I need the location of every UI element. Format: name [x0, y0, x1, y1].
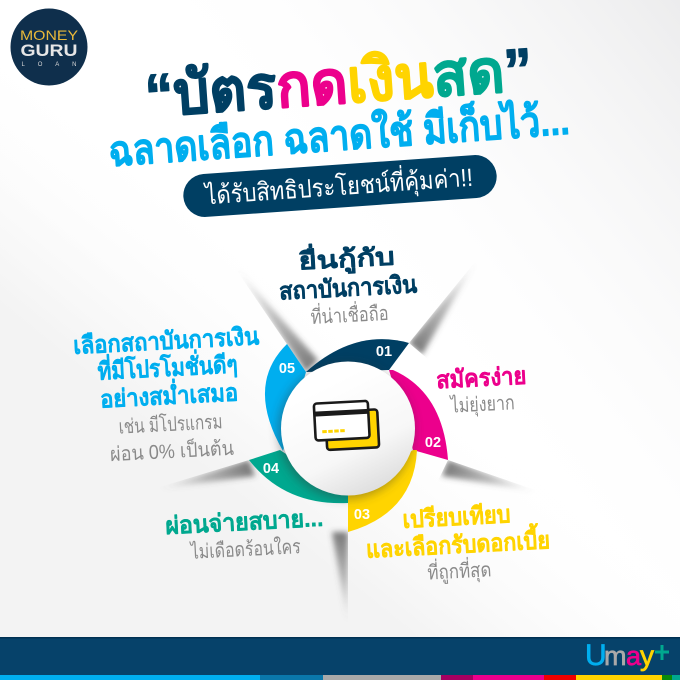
step 03 text — [364, 499, 552, 589]
step 02 text: สมัครง่าย — [436, 363, 527, 394]
icon: credit cards — [314, 400, 379, 451]
step 01 text: สถาบันการเงิน — [279, 271, 418, 306]
banner pill: ได้รับสิทธิประโยชน์ที่คุ้มค่า!! — [202, 160, 474, 212]
step 05 text: ที่มีโปรโมชั่นดีๆ — [97, 346, 238, 386]
logo: Umay+: y — [640, 640, 654, 671]
step 02 text — [436, 363, 528, 419]
segment 02 — [389, 370, 448, 460]
step 05 text — [73, 323, 266, 468]
divider shadows — [175, 276, 521, 606]
banner pill — [182, 154, 498, 218]
segment 05 — [265, 344, 306, 451]
color strip — [0, 675, 680, 680]
segment 04: 04 — [263, 461, 279, 477]
step 05 text: ผ่อน 0% เป็นต้น — [109, 435, 235, 466]
logo: Umay+: U — [585, 639, 607, 672]
step 04 text: ไม่เดือดร้อนใคร — [189, 535, 301, 564]
diagram: five step ring — [249, 339, 448, 532]
step 05 text: เลือกสถาบันการเงิน — [73, 323, 260, 360]
logo: Money Guru Loan: LOAN — [22, 62, 76, 68]
segment 03 — [348, 450, 417, 532]
step 03 text: เปรียบเทียบ — [402, 501, 511, 534]
title: “บัตรกดเงินสด” — [143, 36, 535, 129]
logo: Money Guru Loan: MONEY — [20, 27, 79, 43]
logo plus — [655, 645, 669, 660]
segment 02: 02 — [425, 435, 441, 451]
center circle — [281, 362, 415, 496]
segment 03: 03 — [354, 507, 370, 523]
segment 01: 01 — [376, 344, 392, 360]
logo: Money Guru Loan: GURU — [20, 41, 78, 60]
segment 01 — [306, 339, 409, 372]
step 04 text: ผ่อนจ่ายสบาย... — [165, 505, 324, 540]
step 02 text: ไม่ยุ่งยาก — [448, 391, 515, 419]
step 05 text: เช่น มีโปรแกรม — [118, 410, 223, 439]
logo: Umay+: a — [626, 641, 642, 671]
step 04 text — [165, 505, 325, 565]
segment 04 — [249, 450, 348, 503]
logo: Umay+: m — [604, 641, 626, 671]
logo: Money Guru Loan — [10, 8, 88, 86]
step 01 text: ที่น่าเชื่อถือ — [310, 299, 389, 329]
step 05 text: อย่างสม่ำเสมอ — [99, 374, 239, 414]
subtitle: ฉลาดเลือก ฉลาดใช้ มีเก็บไว้... — [107, 94, 571, 175]
segment 05: 05 — [279, 361, 295, 377]
step 03 text: และเลือกรับดอกเบี้ย — [365, 521, 551, 564]
step 01 text: ยื่นกู้กับ — [298, 239, 395, 277]
step 03 text: ที่ถูกที่สุด — [427, 555, 492, 586]
footer band — [0, 637, 680, 680]
step 01 text — [277, 237, 420, 331]
